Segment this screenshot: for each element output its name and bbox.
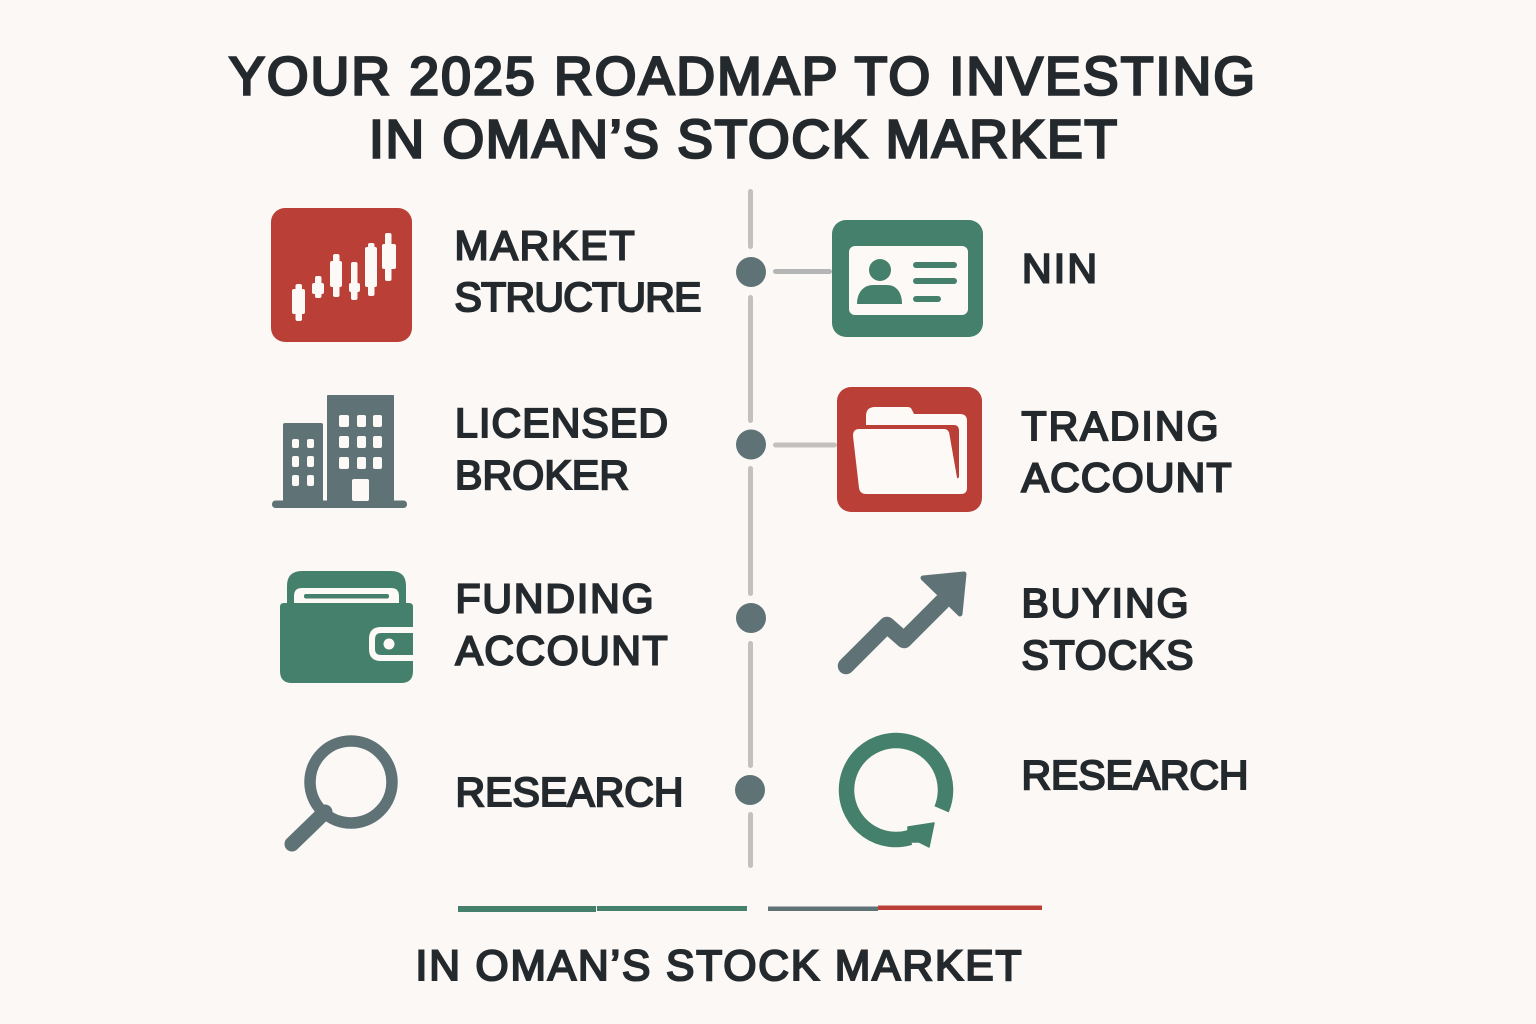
label: funding account: FUNDING (456, 576, 654, 622)
label: research left: RESEARCH (456, 769, 684, 815)
title (229, 48, 1255, 170)
icon: circular arrow (847, 741, 946, 847)
label: market structure (454, 222, 702, 320)
icon: office buildings (272, 395, 407, 508)
label: market structure: STRUCTURE (454, 274, 702, 320)
label: trading account: ACCOUNT (1022, 454, 1232, 500)
label: research right: RESEARCH (1022, 752, 1248, 798)
central timeline (735, 189, 837, 868)
icon: id card (832, 220, 983, 337)
label: buying stocks (1022, 580, 1194, 678)
icon: magnifier (292, 741, 392, 844)
label: funding account (456, 576, 668, 674)
icon: folder (837, 387, 982, 512)
icon: candlestick chart (271, 208, 412, 342)
icon: trend arrow (846, 574, 964, 666)
label: trading account (1022, 403, 1232, 500)
label: funding account: ACCOUNT (456, 628, 668, 674)
label: buying stocks: STOCKS (1022, 632, 1194, 678)
label: buying stocks: BUYING (1022, 580, 1188, 626)
label: licensed broker: BROKER (455, 452, 629, 498)
footer divider lines (458, 906, 1042, 912)
title: IN OMAN’S STOCK MARKET (369, 110, 1117, 170)
label: market structure: MARKET (454, 222, 634, 268)
icon: wallet (280, 571, 413, 683)
label: licensed broker (455, 400, 668, 498)
footer text: IN OMAN’S STOCK MARKET (416, 943, 1022, 990)
title: YOUR 2025 ROADMAP TO INVESTING (229, 48, 1255, 106)
label: nin: NIN (1022, 246, 1097, 292)
label: licensed broker: LICENSED (455, 400, 668, 446)
label: trading account: TRADING (1022, 403, 1218, 449)
